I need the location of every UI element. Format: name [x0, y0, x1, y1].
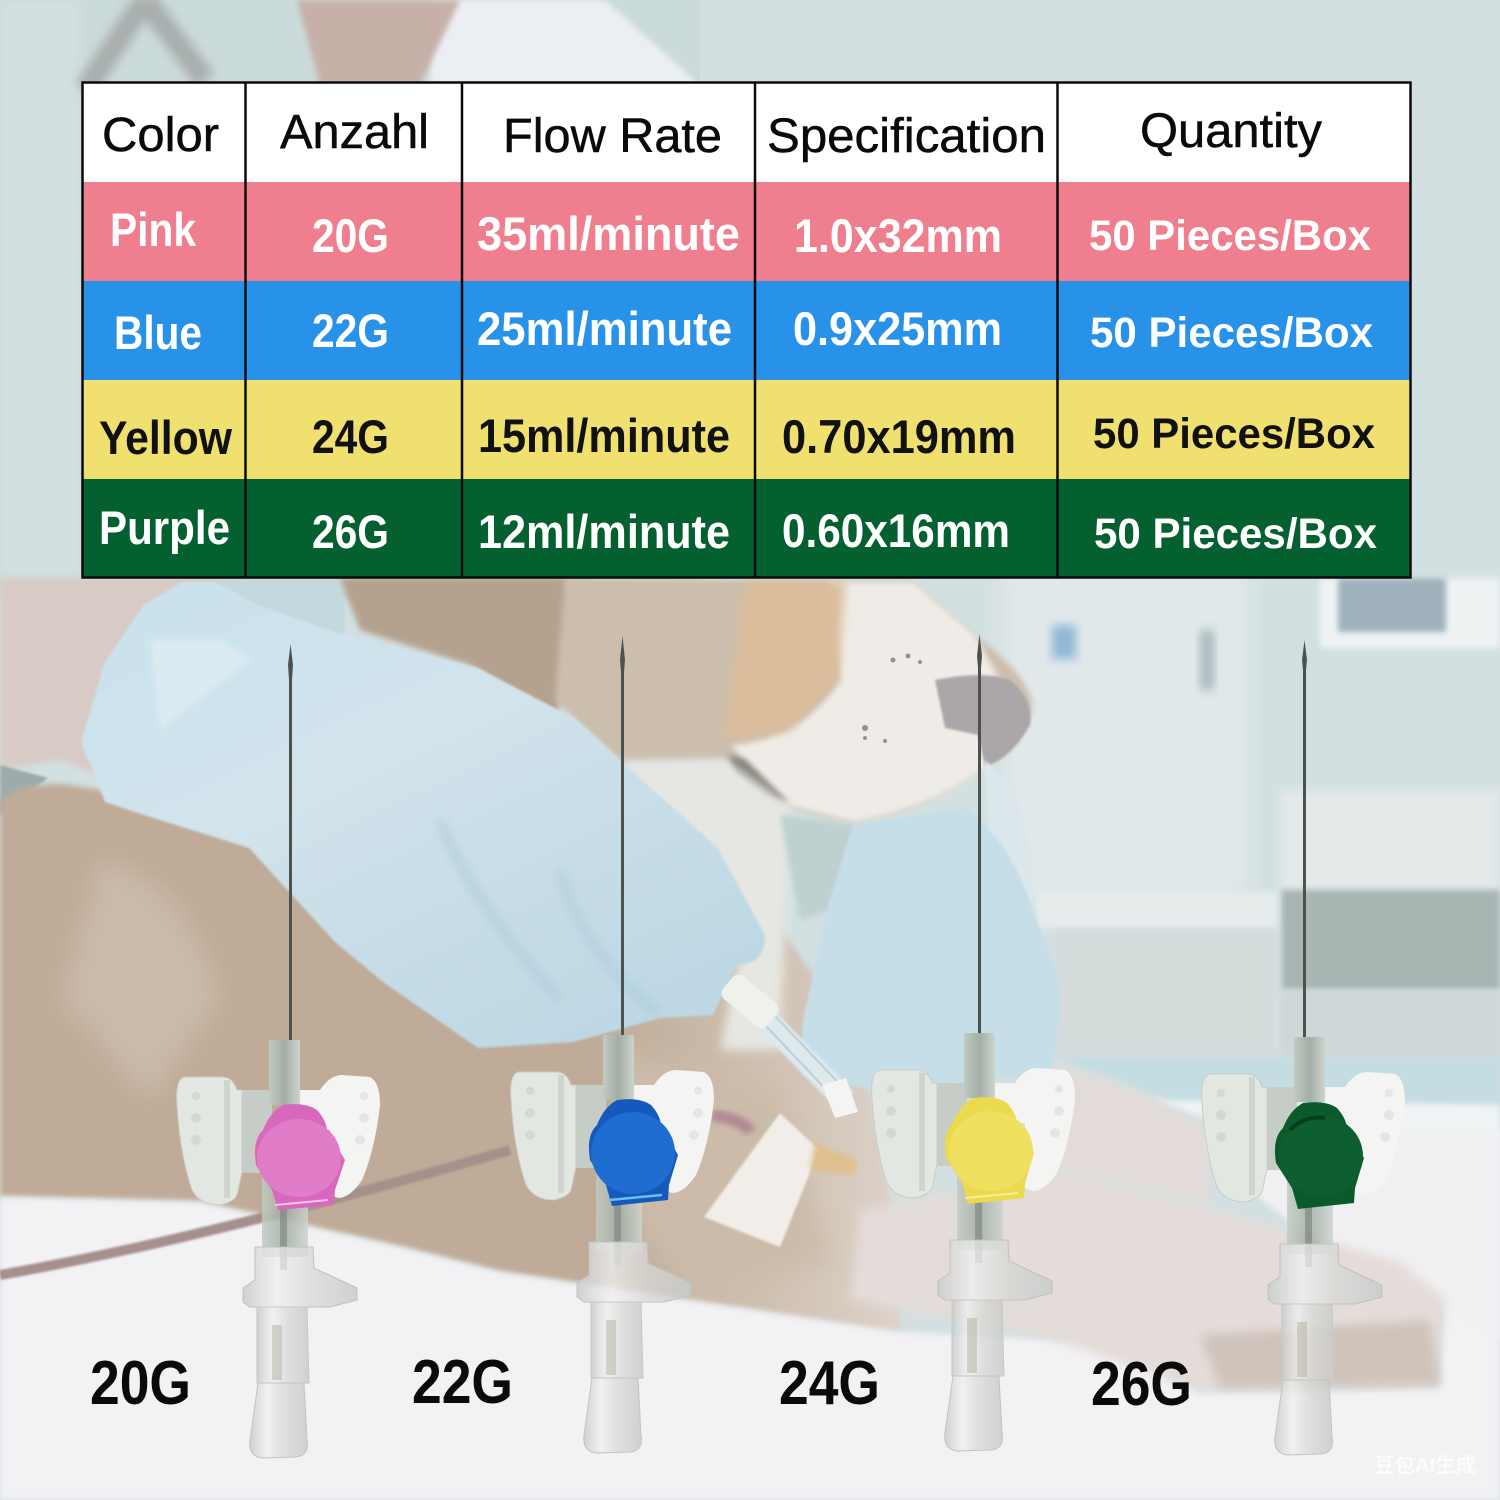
table row: yellow	[82, 380, 1411, 479]
table row: yellow: 50 Pieces/Box	[1093, 410, 1375, 458]
gauge labels: 20G	[90, 1349, 191, 1418]
table row: purple: 12ml/minute	[478, 505, 730, 558]
table row: pink: 50 Pieces/Box	[1089, 212, 1371, 260]
dog paws	[1040, 1060, 1210, 1205]
catheter 22G blue	[511, 636, 714, 1453]
table row: purple	[82, 479, 1411, 578]
table header row: Quantity	[1140, 105, 1322, 158]
gauge labels: 26G	[1091, 1350, 1192, 1419]
catheter 26G green	[1202, 640, 1405, 1455]
dog nose	[935, 675, 1031, 766]
table sheet	[0, 1130, 1500, 1500]
gauge labels	[90, 1348, 1192, 1419]
catheter 24G yellow	[872, 634, 1075, 1451]
dog body	[0, 784, 900, 1335]
bandage	[704, 1113, 819, 1247]
table row: purple: 26G	[312, 505, 389, 558]
table row: blue: 25ml/minute	[477, 302, 732, 355]
table row: pink: Pink	[110, 203, 197, 256]
table	[82, 82, 1411, 578]
gauge labels: 22G	[412, 1348, 513, 1417]
vet torso and coat	[0, 0, 1250, 900]
catheter 20G pink	[177, 644, 380, 1458]
gloved hand left	[81, 582, 765, 1048]
gloved hand right	[802, 808, 1059, 1090]
table row: yellow: 0.70x19mm	[782, 410, 1016, 463]
glove cuff fold	[150, 640, 250, 730]
table row: blue: 22G	[312, 304, 389, 357]
dog eye	[728, 755, 788, 802]
table row: yellow: Yellow	[99, 411, 232, 464]
table row: yellow: 15ml/minute	[478, 409, 730, 462]
table row: purple: Purple	[99, 501, 230, 554]
table row: blue: Blue	[114, 306, 202, 359]
arm skin	[0, 578, 260, 800]
table row: pink: 35ml/minute	[477, 207, 740, 260]
watermark: 豆包AI生成	[1374, 1453, 1476, 1477]
table row: blue: 0.9x25mm	[793, 302, 1002, 355]
dog head	[555, 578, 1032, 822]
table row: purple: 50 Pieces/Box	[1094, 510, 1377, 558]
gauge labels: 24G	[779, 1349, 880, 1418]
dog ear	[340, 578, 571, 720]
muzzle fur	[730, 582, 1000, 822]
table row: pink: 1.0x32mm	[794, 209, 1002, 262]
table row: pink	[82, 182, 1411, 281]
clinic equipment	[1037, 578, 1500, 1105]
table header row	[82, 82, 1411, 182]
table header row: Flow Rate	[503, 110, 722, 163]
table header row: Color	[102, 109, 219, 162]
table row: purple: 0.60x16mm	[782, 504, 1010, 557]
table header row: Specification	[767, 110, 1046, 163]
neck fur	[622, 760, 790, 1050]
table row: blue	[82, 281, 1411, 380]
table row: yellow: 24G	[312, 410, 389, 463]
IV connector tube	[718, 971, 858, 1118]
table header row: Anzahl	[280, 106, 429, 159]
table row: pink: 20G	[312, 209, 389, 262]
table row: blue: 50 Pieces/Box	[1090, 309, 1373, 357]
